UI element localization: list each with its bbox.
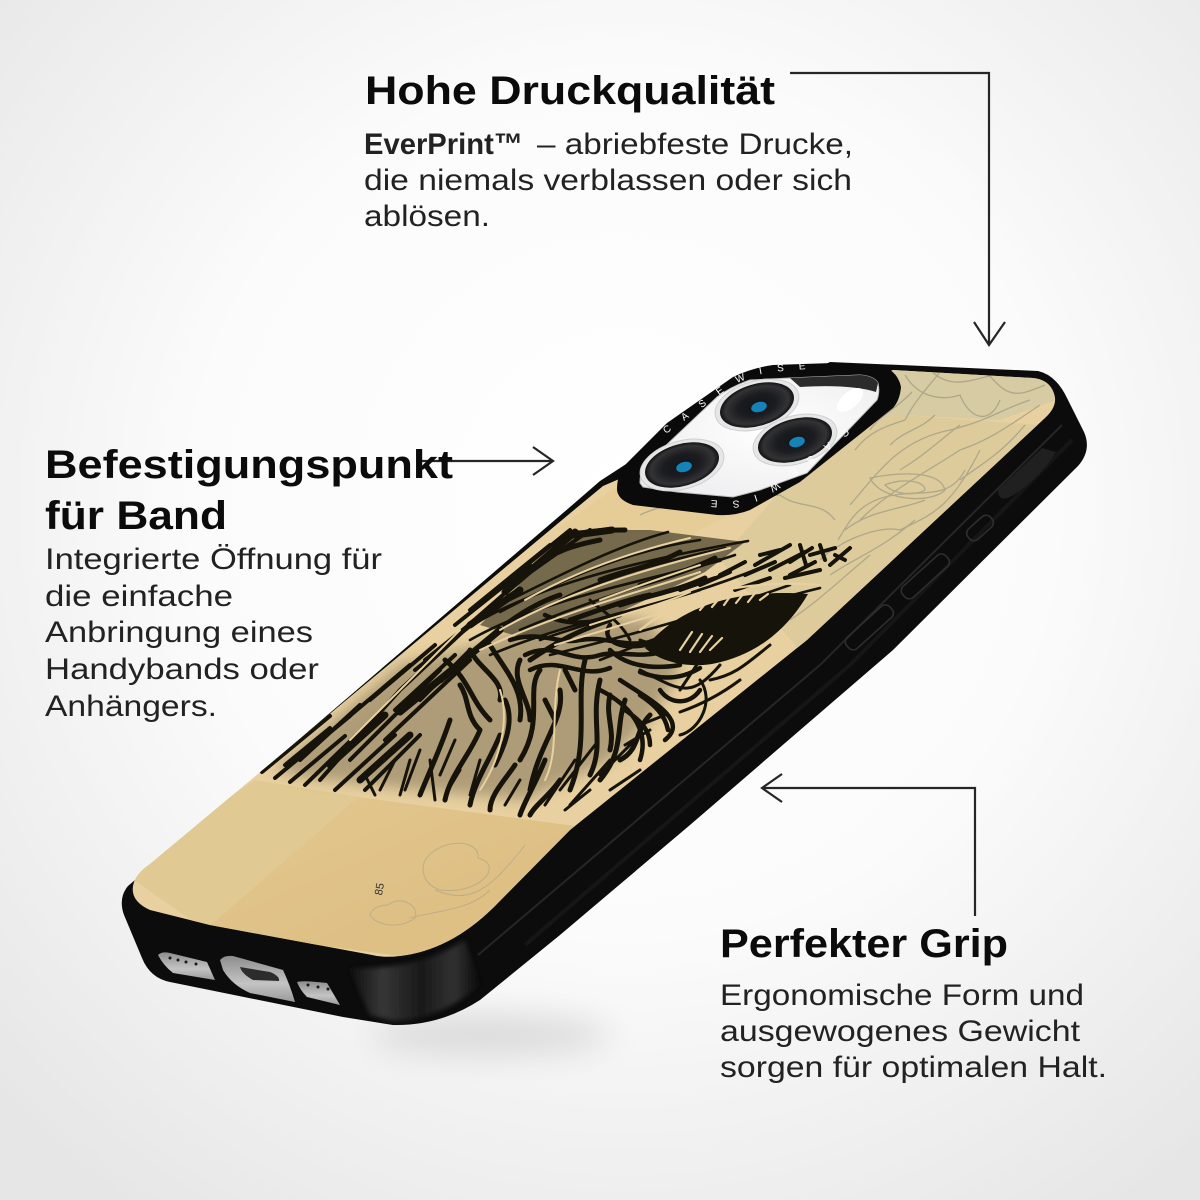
lens highlight <box>833 384 867 416</box>
glossy bottom corner <box>350 940 480 1021</box>
lens top <box>709 370 805 440</box>
description <box>364 128 853 233</box>
text block: Hohe Druckqualität <box>364 69 853 233</box>
text block: Perfekter Grip <box>720 922 1107 1084</box>
heading: Hohe Druckqualität <box>365 69 775 113</box>
camera frame <box>617 363 901 515</box>
description: die einfache <box>45 580 233 613</box>
eye area strokes <box>590 600 770 735</box>
side button: action <box>843 513 996 652</box>
phone case illustration <box>122 362 1087 1025</box>
description: – abriebfeste Drucke, <box>537 128 853 161</box>
arrow: Befestigungspunkt <box>420 447 553 475</box>
speaker left <box>158 952 215 980</box>
heading <box>45 443 453 538</box>
text block: Befestigungspunkt für Band <box>45 443 453 723</box>
heading: für Band <box>45 494 227 538</box>
arrow: Druckqualität <box>790 73 1005 345</box>
heading: Perfekter Grip <box>720 922 1008 966</box>
lens right <box>747 405 843 475</box>
top flowing lines <box>470 532 820 660</box>
marble lines <box>640 370 1045 620</box>
side patch <box>998 448 1056 498</box>
description: Handybands oder <box>45 653 319 686</box>
small mark: 85 <box>373 882 387 896</box>
wood back panel <box>132 370 1056 957</box>
arrow: Grip <box>762 774 975 916</box>
camera window shade <box>790 375 878 392</box>
usb port <box>220 956 295 1002</box>
description: ausgewogenes Gewicht <box>720 1015 1081 1048</box>
lower right panel <box>205 797 590 960</box>
description <box>45 543 382 723</box>
heading: Befestigungspunkt <box>45 443 453 487</box>
description: sorgen für optimalen Halt. <box>720 1051 1107 1084</box>
artwork eye <box>645 593 808 665</box>
eye highlights <box>640 584 820 652</box>
central swirl <box>510 615 700 760</box>
artwork halftone mass <box>480 530 745 640</box>
diagonal left band <box>262 530 590 790</box>
lens left <box>634 430 730 500</box>
description: die niemals verblassen oder sich <box>364 164 852 197</box>
ports <box>158 952 340 1005</box>
description: Integrierte Öffnung für <box>45 543 382 576</box>
lower left panel <box>120 780 358 930</box>
description: Ergonomische Form und <box>720 979 1084 1012</box>
camera brand top: CASEWISE <box>664 364 806 432</box>
phone shadow <box>370 1015 610 1055</box>
artwork strokes <box>262 530 850 815</box>
upper panel area <box>884 370 1056 420</box>
camera brand bottom: CASEWISE <box>711 430 849 508</box>
camera island <box>617 363 901 516</box>
cream streaks <box>350 538 740 790</box>
side rim highlight <box>478 425 1062 955</box>
camera window <box>640 375 879 497</box>
description: Anhängers. <box>45 690 217 723</box>
description: Anbringung eines <box>45 616 313 649</box>
top right brush marks <box>680 545 850 590</box>
speaker right <box>297 981 340 1005</box>
lower wavy vertical strokes <box>420 645 650 815</box>
description: EverPrint™ <box>364 128 523 161</box>
speaker holes <box>168 956 330 990</box>
case body <box>122 362 1087 1025</box>
description <box>720 979 1107 1084</box>
description: ablösen. <box>364 200 490 233</box>
